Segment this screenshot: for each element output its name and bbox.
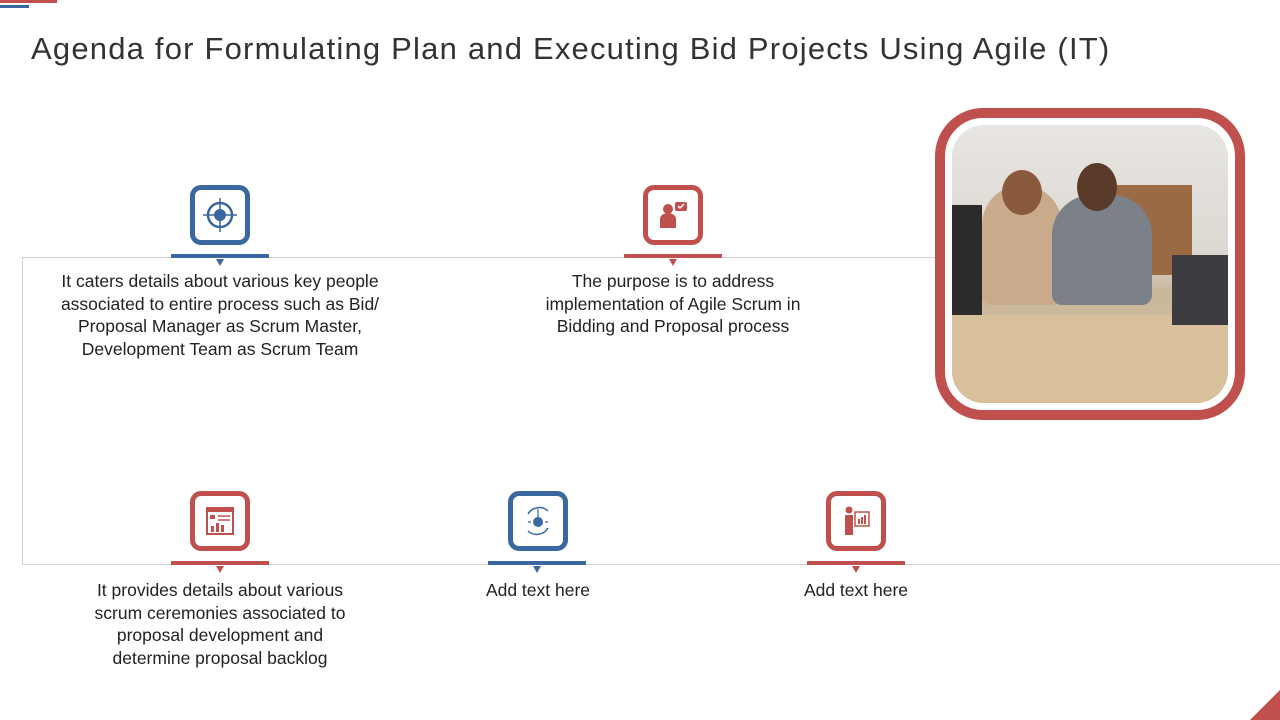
text: Add text here [486, 580, 590, 600]
text: It caters details about various key people associated to entire process such as Bid/ Proposal Manager as Scrum Master, Development Team as Scrum Team [61, 271, 379, 358]
icon: dashboard [190, 491, 250, 551]
photo frame [935, 108, 1245, 420]
text: It provides details about various scrum ceremonies associated to proposal development and determine proposal backlog [95, 580, 345, 668]
item 1 [61, 185, 379, 358]
corner accent triangle [1250, 690, 1280, 720]
icon: target [190, 185, 250, 245]
text: Add text here [804, 580, 908, 600]
text: The purpose is to address implementation of Agile Scrum in Bidding and Proposal process [546, 271, 800, 336]
timeline frame lines [22, 257, 935, 258]
icon: idea cycle [508, 491, 568, 551]
top accent bars [0, 0, 57, 3]
item 5 [804, 491, 908, 600]
title: Agenda for Formulating Plan and Executing Bid Projects Using Agile (IT) [31, 31, 1110, 66]
photo: meeting [952, 125, 1228, 403]
item 4 [486, 491, 590, 600]
icon: presenter with chart [826, 491, 886, 551]
icon: presenter [643, 185, 703, 245]
item 3 [95, 491, 345, 668]
item 2 [546, 185, 800, 336]
